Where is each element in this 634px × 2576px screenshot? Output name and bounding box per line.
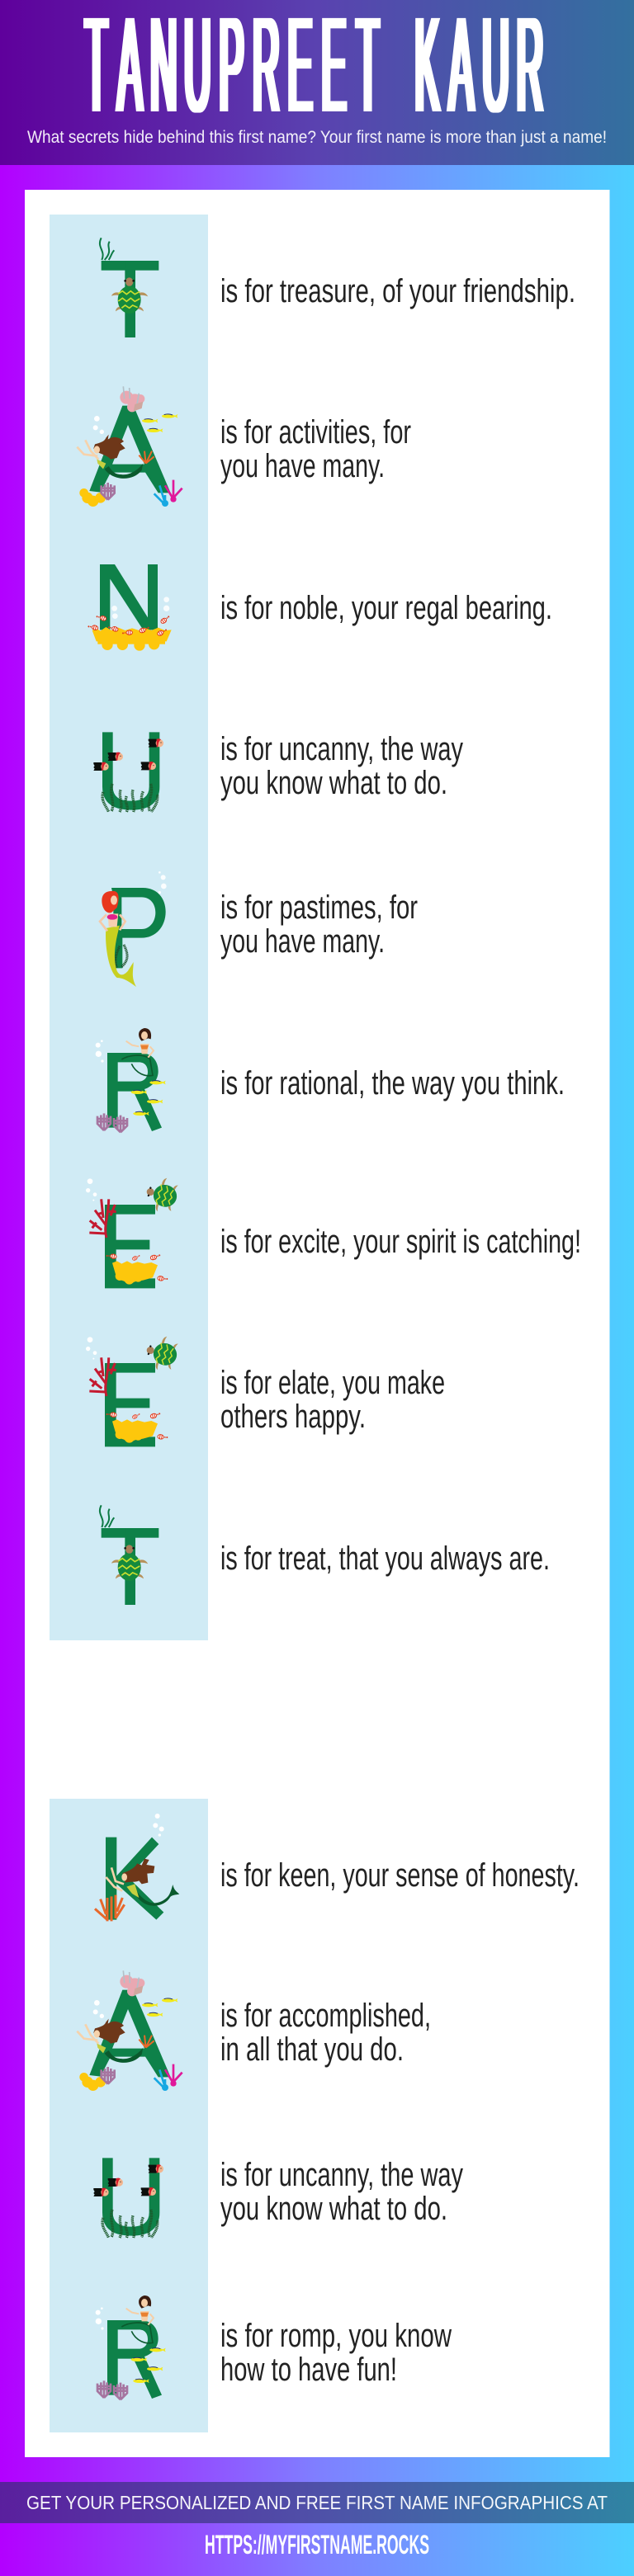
text: A: in all that you do.: [220, 2031, 404, 2068]
footer band: [0, 2482, 634, 2523]
text: P: you have many.: [220, 923, 385, 960]
header band: [0, 0, 634, 165]
text: E: is for elate, you make: [220, 1365, 445, 1401]
first name letter column: [50, 215, 208, 1640]
text: U: is for uncanny, the way: [220, 2157, 463, 2193]
icon: letter R with mermaid: [96, 1028, 166, 1132]
text: U: [220, 2157, 463, 2227]
text: A: is for accomplished,: [220, 1998, 431, 2034]
text: R: how to have fun!: [220, 2352, 397, 2388]
icon: letter N with coral: [88, 564, 172, 651]
icon: letter T with turtle: [100, 238, 158, 337]
icon: letter K with mermaid: [95, 1814, 179, 1921]
text: R: [220, 2318, 452, 2388]
icon: letter U with fish: [93, 732, 163, 812]
icon: letter P with mermaid: [100, 871, 167, 987]
icon: letter E with turtle: [86, 1333, 181, 1446]
text: R: is for romp, you know: [220, 2318, 452, 2354]
icon: letter R with mermaid: [96, 2295, 166, 2399]
text: U: [220, 731, 463, 801]
text: A: is for activities, for: [220, 414, 411, 451]
text: A: [220, 1998, 431, 2068]
icon: letter U with fish: [93, 2158, 163, 2238]
icon: letter A with mermaid: [77, 1970, 182, 2091]
text: U: you know what to do.: [220, 2191, 447, 2227]
icon: letter A with mermaid: [77, 386, 182, 507]
text: E: others happy.: [220, 1399, 366, 1435]
icon: letter E with turtle: [86, 1174, 181, 1288]
footer url: HTTPS://MYFIRSTNAME.ROCKS: [205, 2530, 429, 2559]
text: U: is for uncanny, the way: [220, 731, 463, 767]
text: P: [220, 889, 418, 960]
icon: letter T with turtle: [100, 1505, 158, 1605]
text: E: [220, 1365, 445, 1435]
text: P: is for pastimes, for: [220, 889, 418, 926]
text: A: [220, 414, 411, 484]
text: U: you know what to do.: [220, 765, 447, 801]
text: A: you have many.: [220, 448, 385, 484]
last name letter column: [50, 1799, 208, 2432]
